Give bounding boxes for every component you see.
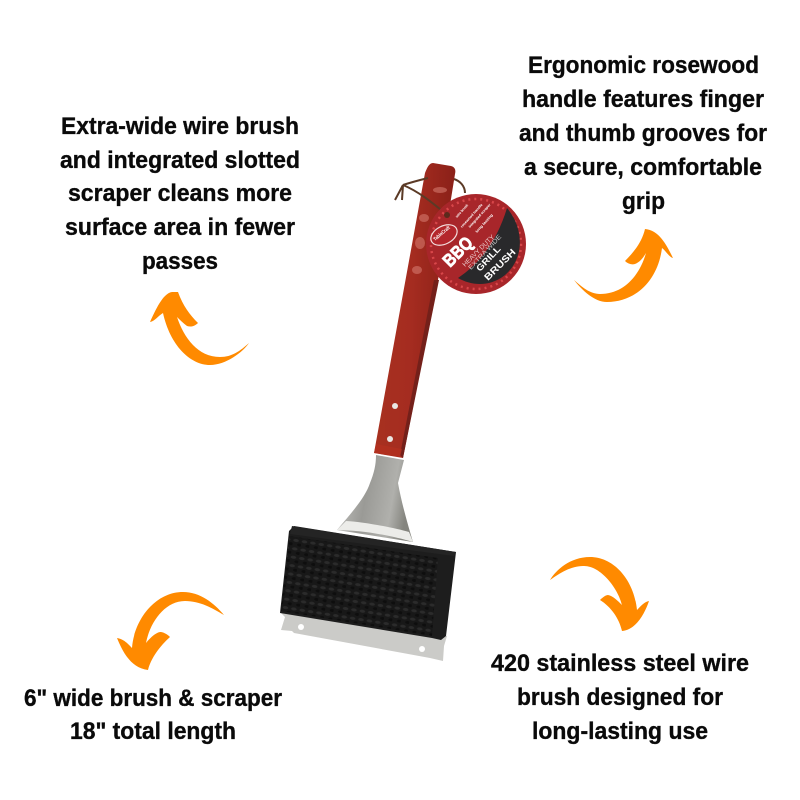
product: grill brush	[280, 163, 526, 661]
hang tag: BRUSH	[482, 247, 519, 283]
text: wire brush and scraper feature: Extra-wide wire brush	[61, 113, 299, 140]
text: rosewood handle feature: and thumb grooves for	[519, 120, 767, 147]
hang tag: BBQ	[439, 233, 477, 271]
hang tag: EXTRA WIDE	[467, 233, 504, 271]
hang tag	[426, 194, 526, 294]
handle	[374, 163, 455, 458]
text: rosewood handle feature: handle features finger	[522, 86, 764, 113]
scraper plate	[280, 608, 447, 661]
arrow: bottom left, pointing down to the dimensions text	[117, 592, 224, 670]
brush block	[280, 526, 456, 640]
text: rosewood handle feature	[519, 52, 767, 215]
text: stainless steel feature: 420 stainless steel wire	[491, 650, 749, 677]
arrow: top left, pointing up to the brush text	[150, 292, 249, 365]
spatula neck	[337, 455, 413, 542]
text: dimensions: 6" wide brush & scraper	[24, 685, 282, 712]
text: wire brush and scraper feature	[60, 113, 300, 275]
text: dimensions: 18" total length	[70, 718, 236, 745]
text: wire brush and scraper feature: surface area in fewer	[65, 214, 295, 241]
hang tag: long lasting	[475, 213, 494, 234]
hang tag: rosewood handle	[460, 203, 484, 229]
leather cord	[395, 178, 465, 214]
arrow: bottom right, pointing down to the stainless steel text	[550, 557, 649, 631]
text: wire brush and scraper feature: passes	[142, 248, 218, 275]
text: rosewood handle feature: a secure, comfortable	[524, 154, 762, 181]
hang tag: GRILL	[474, 243, 503, 273]
text: wire brush and scraper feature: scraper cleans more	[68, 180, 292, 207]
text: stainless steel feature: long-lasting use	[532, 718, 708, 745]
text: stainless steel feature	[491, 650, 749, 745]
text: stainless steel feature: brush designed for	[517, 684, 723, 711]
text: dimensions	[24, 685, 282, 745]
rivets	[392, 403, 398, 409]
arrow: top right, pointing up to the handle text	[574, 229, 673, 302]
hang tag: HEAVY DUTY	[461, 233, 497, 268]
hang tag: wire brush	[454, 203, 469, 219]
text: wire brush and scraper feature: and integrated slotted	[60, 147, 300, 174]
text: rosewood handle feature: grip	[622, 188, 665, 215]
hang tag: TableCraft	[432, 225, 452, 243]
text: rosewood handle feature: Ergonomic rosewood	[528, 52, 759, 79]
hang tag: integrated scraper	[468, 202, 492, 229]
